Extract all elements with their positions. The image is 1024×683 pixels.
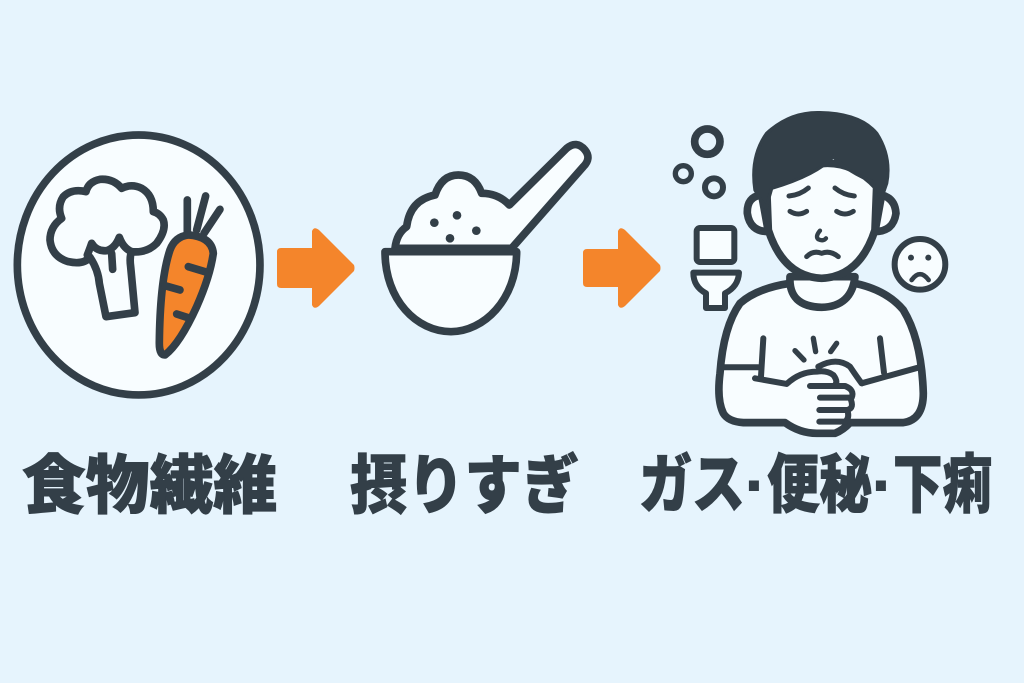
icon: sad face: [895, 239, 945, 290]
label: gas, constipation, diarrhea: [639, 449, 992, 521]
label: dietary fiber: 食物繊維: [22, 450, 277, 522]
face features: [789, 188, 854, 214]
icon: person with stomach ache: [675, 113, 945, 433]
label: gas, constipation, diarrhea: ·: [745, 449, 766, 521]
hair: [754, 113, 888, 208]
label: too much intake: 摂りすぎ: [350, 450, 579, 522]
head: [747, 113, 896, 278]
label: gas, constipation, diarrhea: ·: [872, 449, 893, 521]
arrow: second: [583, 228, 660, 308]
arrow: first: [277, 228, 354, 308]
icon: carrot: [159, 196, 220, 355]
label: gas, constipation, diarrhea: 便秘: [767, 449, 872, 521]
body: [719, 277, 923, 433]
icon: broccoli: [50, 179, 164, 317]
label: gas, constipation, diarrhea: ガス: [639, 449, 745, 521]
icon: gas bubbles: [675, 129, 723, 196]
icon: rice bowl with scoop: [385, 145, 588, 332]
icon: vegetables in circle: [17, 135, 260, 395]
label: gas, constipation, diarrhea: 下痢: [893, 449, 992, 521]
icon: toilet: [693, 228, 739, 308]
